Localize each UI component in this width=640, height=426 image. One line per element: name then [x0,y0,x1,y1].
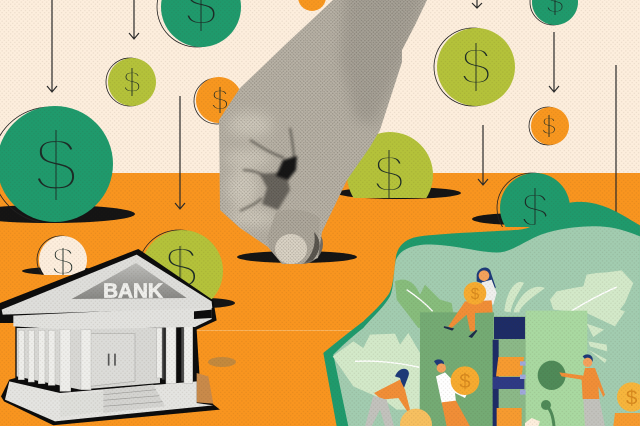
shelf [493,377,524,389]
coin: top orange sliver [298,0,326,11]
background: orange ground [0,173,640,426]
grey shadow inside fist [260,172,290,210]
leaf: top right [550,270,633,326]
safe dial [538,361,566,390]
leaf veins [355,287,617,367]
coin: top right green dollar [530,0,578,25]
lighter knuckles [224,113,276,227]
coin: small orange dollar: $ [542,112,556,140]
ground seam line [195,330,395,331]
safe left door [420,312,494,426]
black outline [0,249,220,425]
stair lines [103,390,163,406]
shelf hooks [520,361,528,395]
right column gap [181,328,183,381]
person: man at dial [559,354,605,426]
safe dark top [494,317,525,339]
entablature [13,306,212,330]
hand dropping coin [219,0,430,264]
coin: lime dollar in hole [347,132,433,198]
bank building [0,249,220,425]
holes in ground [0,187,570,308]
coin: lime dollar behind bank [142,230,223,300]
shadow patch [208,357,236,367]
base shaded side [60,391,103,417]
coin: lime dollar behind bank: $ [164,234,198,301]
safe right door [526,311,587,426]
left columns [18,330,91,391]
person: top woman with coin: $ [471,286,480,303]
coin: large lime dollar: $ [461,37,491,97]
fist and arm [219,0,427,264]
coin edge beside thumb [303,232,320,264]
entablature black notch [194,310,212,319]
pediment recess [72,263,187,299]
door handles [109,354,115,366]
coin: green dollar in hole [496,172,570,227]
coin: top green dollar [157,0,241,47]
person: woman bending [365,369,432,426]
coin: cream dollar in hole: $ [52,240,74,284]
coin: lime dollar in hole: $ [374,144,404,204]
leaf: top left [395,280,453,328]
coin: large green dollar [0,106,113,223]
panel fill [333,226,640,426]
coin: green dollar in hole: $ [521,182,549,238]
safe inside [493,316,532,426]
thumb [267,210,320,264]
soft shadow by base [197,373,213,404]
doors [90,334,135,386]
small coin pile [525,418,540,426]
hand shading [224,0,430,264]
halftone on hand [219,0,427,264]
back wall [17,328,160,390]
person: man in white with coin [434,359,479,426]
coin stack right [613,382,640,426]
roof [2,255,212,315]
coin: orange dollar behind hand: $ [212,84,229,117]
coin: small lime dollar: $ [123,64,141,100]
safe dark edge [493,340,499,426]
arrows falling [47,0,616,230]
coins stacked [496,357,524,426]
right columns [157,326,193,384]
bank label: BANK [103,280,163,303]
panel border [323,202,640,426]
coin in hand [281,224,323,264]
coin: large green dollar: $ [34,120,78,208]
shaded arm [340,0,430,125]
thumbnail [275,234,307,264]
person: man in white with coin: $ [459,371,471,393]
vault illustration panel [323,202,640,426]
safe hook handle [546,406,554,426]
dark hollow of fist [276,156,297,180]
stairs [103,385,165,413]
coin: cream dollar in hole [36,236,87,275]
coin: small lime dollar [106,58,156,106]
finger creases [240,128,294,211]
coin: orange dollar behind hand [194,77,242,124]
person: top woman with coin [444,268,497,337]
temple base [5,381,213,421]
leaf: small centre [504,282,545,312]
right dark gap [162,328,165,380]
leaf: right lower fronds [587,324,607,363]
coin: small orange dollar [529,107,569,145]
leaf: left [333,333,420,410]
background: cream sky [0,0,640,174]
coin: large lime dollar [434,28,515,106]
coin stack right: $ [626,387,638,410]
